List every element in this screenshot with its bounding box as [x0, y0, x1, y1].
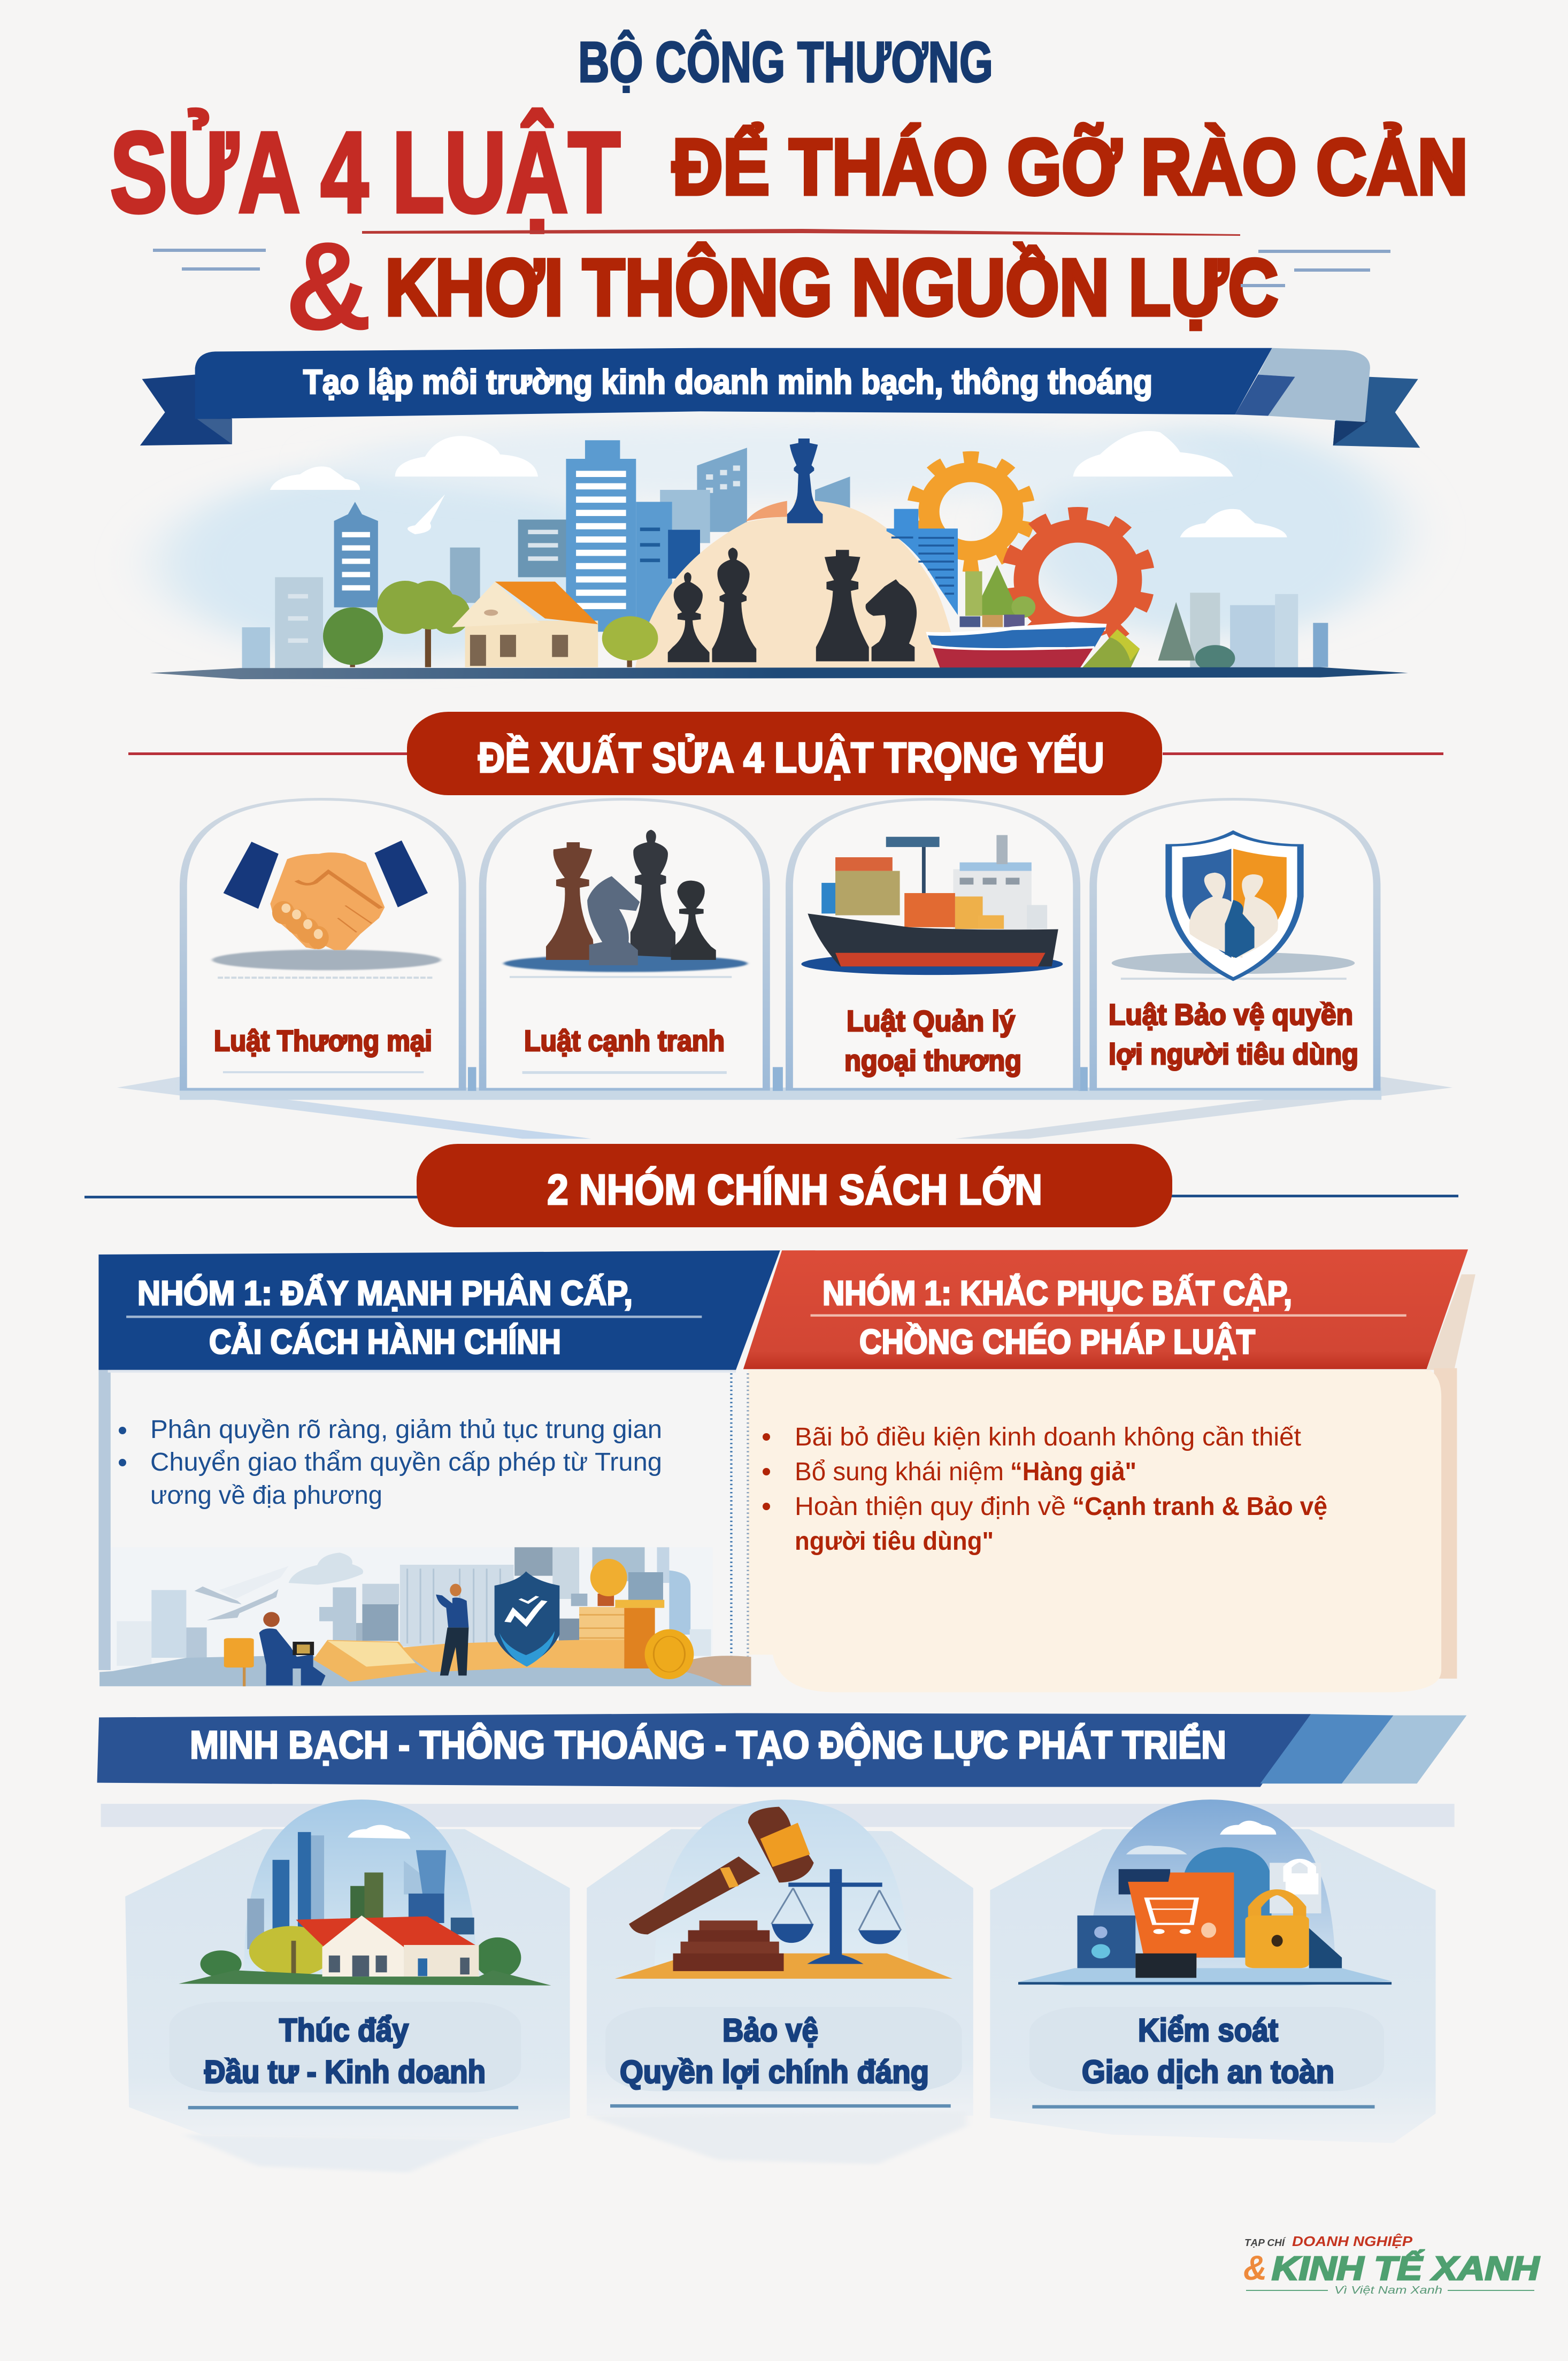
- icon: gavel and scales: [615, 1807, 952, 1979]
- heading: để tháo gỡ rào cản: ĐỂ THÁO GỠ RÀO CẢN: [672, 123, 1468, 211]
- bullet list: “Cạnh tranh & Bảo vệ: [1072, 1493, 1327, 1521]
- label: Luật Quản lý: [847, 1004, 1015, 1037]
- label: Luật cạnh tranh: [524, 1024, 725, 1057]
- label: Kiểm soát: [1138, 2012, 1278, 2048]
- section heading: 4 laws: [128, 712, 1443, 795]
- section heading: 2 policy groups: [84, 1144, 1458, 1227]
- header shape: [98, 1250, 780, 1370]
- logo: magazine: &: [1243, 2248, 1267, 2287]
- card: commercial law: [183, 799, 463, 1089]
- icon: chess pieces: [504, 830, 748, 978]
- bullet list: Bổ sung khái niệm: [795, 1458, 1004, 1486]
- bullet list: “Hàng giả": [1010, 1458, 1136, 1486]
- label: [620, 2012, 929, 2090]
- icon: shield with people: [1112, 832, 1355, 980]
- card: competition law: [483, 799, 766, 1089]
- figure: standing officer: [436, 1584, 468, 1675]
- bullet list: Chuyển giao thẩm quyền cấp phép từ Trung: [150, 1448, 662, 1476]
- bullet list: ương về địa phương: [150, 1481, 382, 1510]
- platform under arch cards: [117, 1067, 1452, 1139]
- panel: policy group left: [98, 1250, 780, 1687]
- gear: red: [998, 505, 1157, 654]
- header text: NHÓM 1: ĐẨY MẠNH PHÂN CẤP,: [137, 1273, 633, 1312]
- header text: [137, 1273, 633, 1361]
- chess: blue king: [787, 439, 823, 523]
- heading: khơi thông nguồn lực: KHƠI THÔNG NGUỒN LỰC: [385, 242, 1278, 332]
- figure: seated worker: [224, 1612, 326, 1686]
- header shape: [743, 1249, 1468, 1369]
- illustration: city, chess and gears: [150, 421, 1408, 679]
- icon: handshake: [212, 841, 441, 978]
- label: Luật Bảo vệ quyền: [1109, 998, 1353, 1031]
- ribbon shape: [140, 348, 1420, 448]
- trees: [323, 581, 1235, 672]
- logo: magazine: TẠP CHÍ: [1244, 2237, 1286, 2248]
- ground: [150, 667, 1408, 679]
- pill text: 2 NHÓM CHÍNH SÁCH LỚN: [547, 1166, 1042, 1213]
- bullet list: [763, 1423, 1327, 1556]
- label: Luật Thương mại: [214, 1024, 432, 1057]
- panel: investment: [125, 1799, 570, 2173]
- illustration: business and administration: [99, 1547, 751, 1686]
- body: [748, 1370, 1441, 1692]
- dome: [746, 501, 787, 521]
- pill text: ĐỀ XUẤT SỬA 4 LUẬT TRỌNG YẾU: [478, 734, 1104, 781]
- trees near ship: [973, 565, 1020, 615]
- ship: [926, 622, 1106, 638]
- icon: shield: [495, 1571, 559, 1667]
- panel: control: [990, 1799, 1436, 2143]
- label: Đầu tư - Kinh doanh: [204, 2054, 486, 2090]
- card: foreign trade law: [789, 799, 1077, 1089]
- label: Quyền lợi chính đáng: [620, 2054, 929, 2090]
- heading: ampersand: &: [285, 216, 372, 356]
- clouds: [270, 431, 1287, 537]
- ribbon banner: [140, 348, 1420, 448]
- label: [844, 1004, 1021, 1077]
- bullet list: Phân quyền rõ ràng, giảm thủ tục trung gian: [150, 1416, 662, 1444]
- label: Giao dịch an toàn: [1082, 2054, 1334, 2090]
- label: Bảo vệ: [722, 2012, 818, 2048]
- text backing: [1029, 2007, 1384, 2091]
- banner text: MINH BẠCH - THÔNG THOÁNG - TẠO ĐỘNG LỰC PHÁT TRIỂN: [190, 1724, 1226, 1767]
- panel: policy group right: [743, 1249, 1475, 1692]
- logo: magazine: DOANH NGHIỆP: [1292, 2233, 1413, 2249]
- central scene: [635, 439, 1157, 668]
- text backing: [605, 2007, 962, 2091]
- header text: CẢI CÁCH HÀNH CHÍNH: [209, 1322, 561, 1361]
- law cards: [183, 799, 1377, 1089]
- banner: transparency slogan: [97, 1713, 1466, 1787]
- label: [1109, 998, 1358, 1071]
- gear: orange: [906, 451, 1036, 573]
- bullet list: người tiêu dùng": [795, 1527, 994, 1556]
- header text: [823, 1273, 1292, 1361]
- header text: CHỒNG CHÉO PHÁP LUẬT: [859, 1322, 1255, 1361]
- label: Thúc đẩy: [279, 2012, 409, 2048]
- pill: [417, 1144, 1172, 1227]
- ribbon text: Tạo lập môi trường kinh doanh minh bạch, thông thoáng: [303, 363, 1152, 401]
- house: [452, 582, 598, 667]
- logo: magazine: [1243, 2233, 1540, 2296]
- label: lợi người tiêu dùng: [1109, 1037, 1358, 1071]
- icon: e-commerce and lock: [1018, 1821, 1392, 1986]
- bullet list: Hoàn thiện quy định về: [795, 1493, 1066, 1521]
- label: ngoại thương: [844, 1044, 1021, 1077]
- text backing: [170, 2002, 521, 2093]
- outcome panels: [125, 1799, 1436, 2173]
- bullet list: Bãi bỏ điều kiện kinh doanh không cần thiết: [795, 1423, 1301, 1451]
- heading: ministry name: BỘ CÔNG THƯƠNG: [578, 29, 993, 94]
- chess: black pieces: [668, 548, 917, 662]
- building right of dome: [887, 509, 958, 615]
- pill: [407, 712, 1162, 795]
- panel: protection: [587, 1799, 973, 2164]
- background buildings: [242, 440, 1328, 670]
- label: [204, 2012, 486, 2090]
- heading: sửa 4 luật: SỬA 4 LUẬT: [110, 109, 620, 236]
- bullet list: [119, 1416, 662, 1510]
- logo: magazine: Vì Việt Nam Xanh: [1334, 2285, 1442, 2296]
- icon: cargo ship: [801, 835, 1063, 975]
- card: consumer protection law: [1093, 799, 1377, 1089]
- outcome band: [101, 1804, 1455, 1827]
- title block: [110, 29, 1468, 356]
- logo: magazine: KINH TẾ XANH: [1272, 2250, 1540, 2287]
- label: [1082, 2012, 1334, 2090]
- header text: NHÓM 1: KHẮC PHỤC BẤT CẬP,: [823, 1273, 1292, 1312]
- icon: city with house: [179, 1825, 551, 1986]
